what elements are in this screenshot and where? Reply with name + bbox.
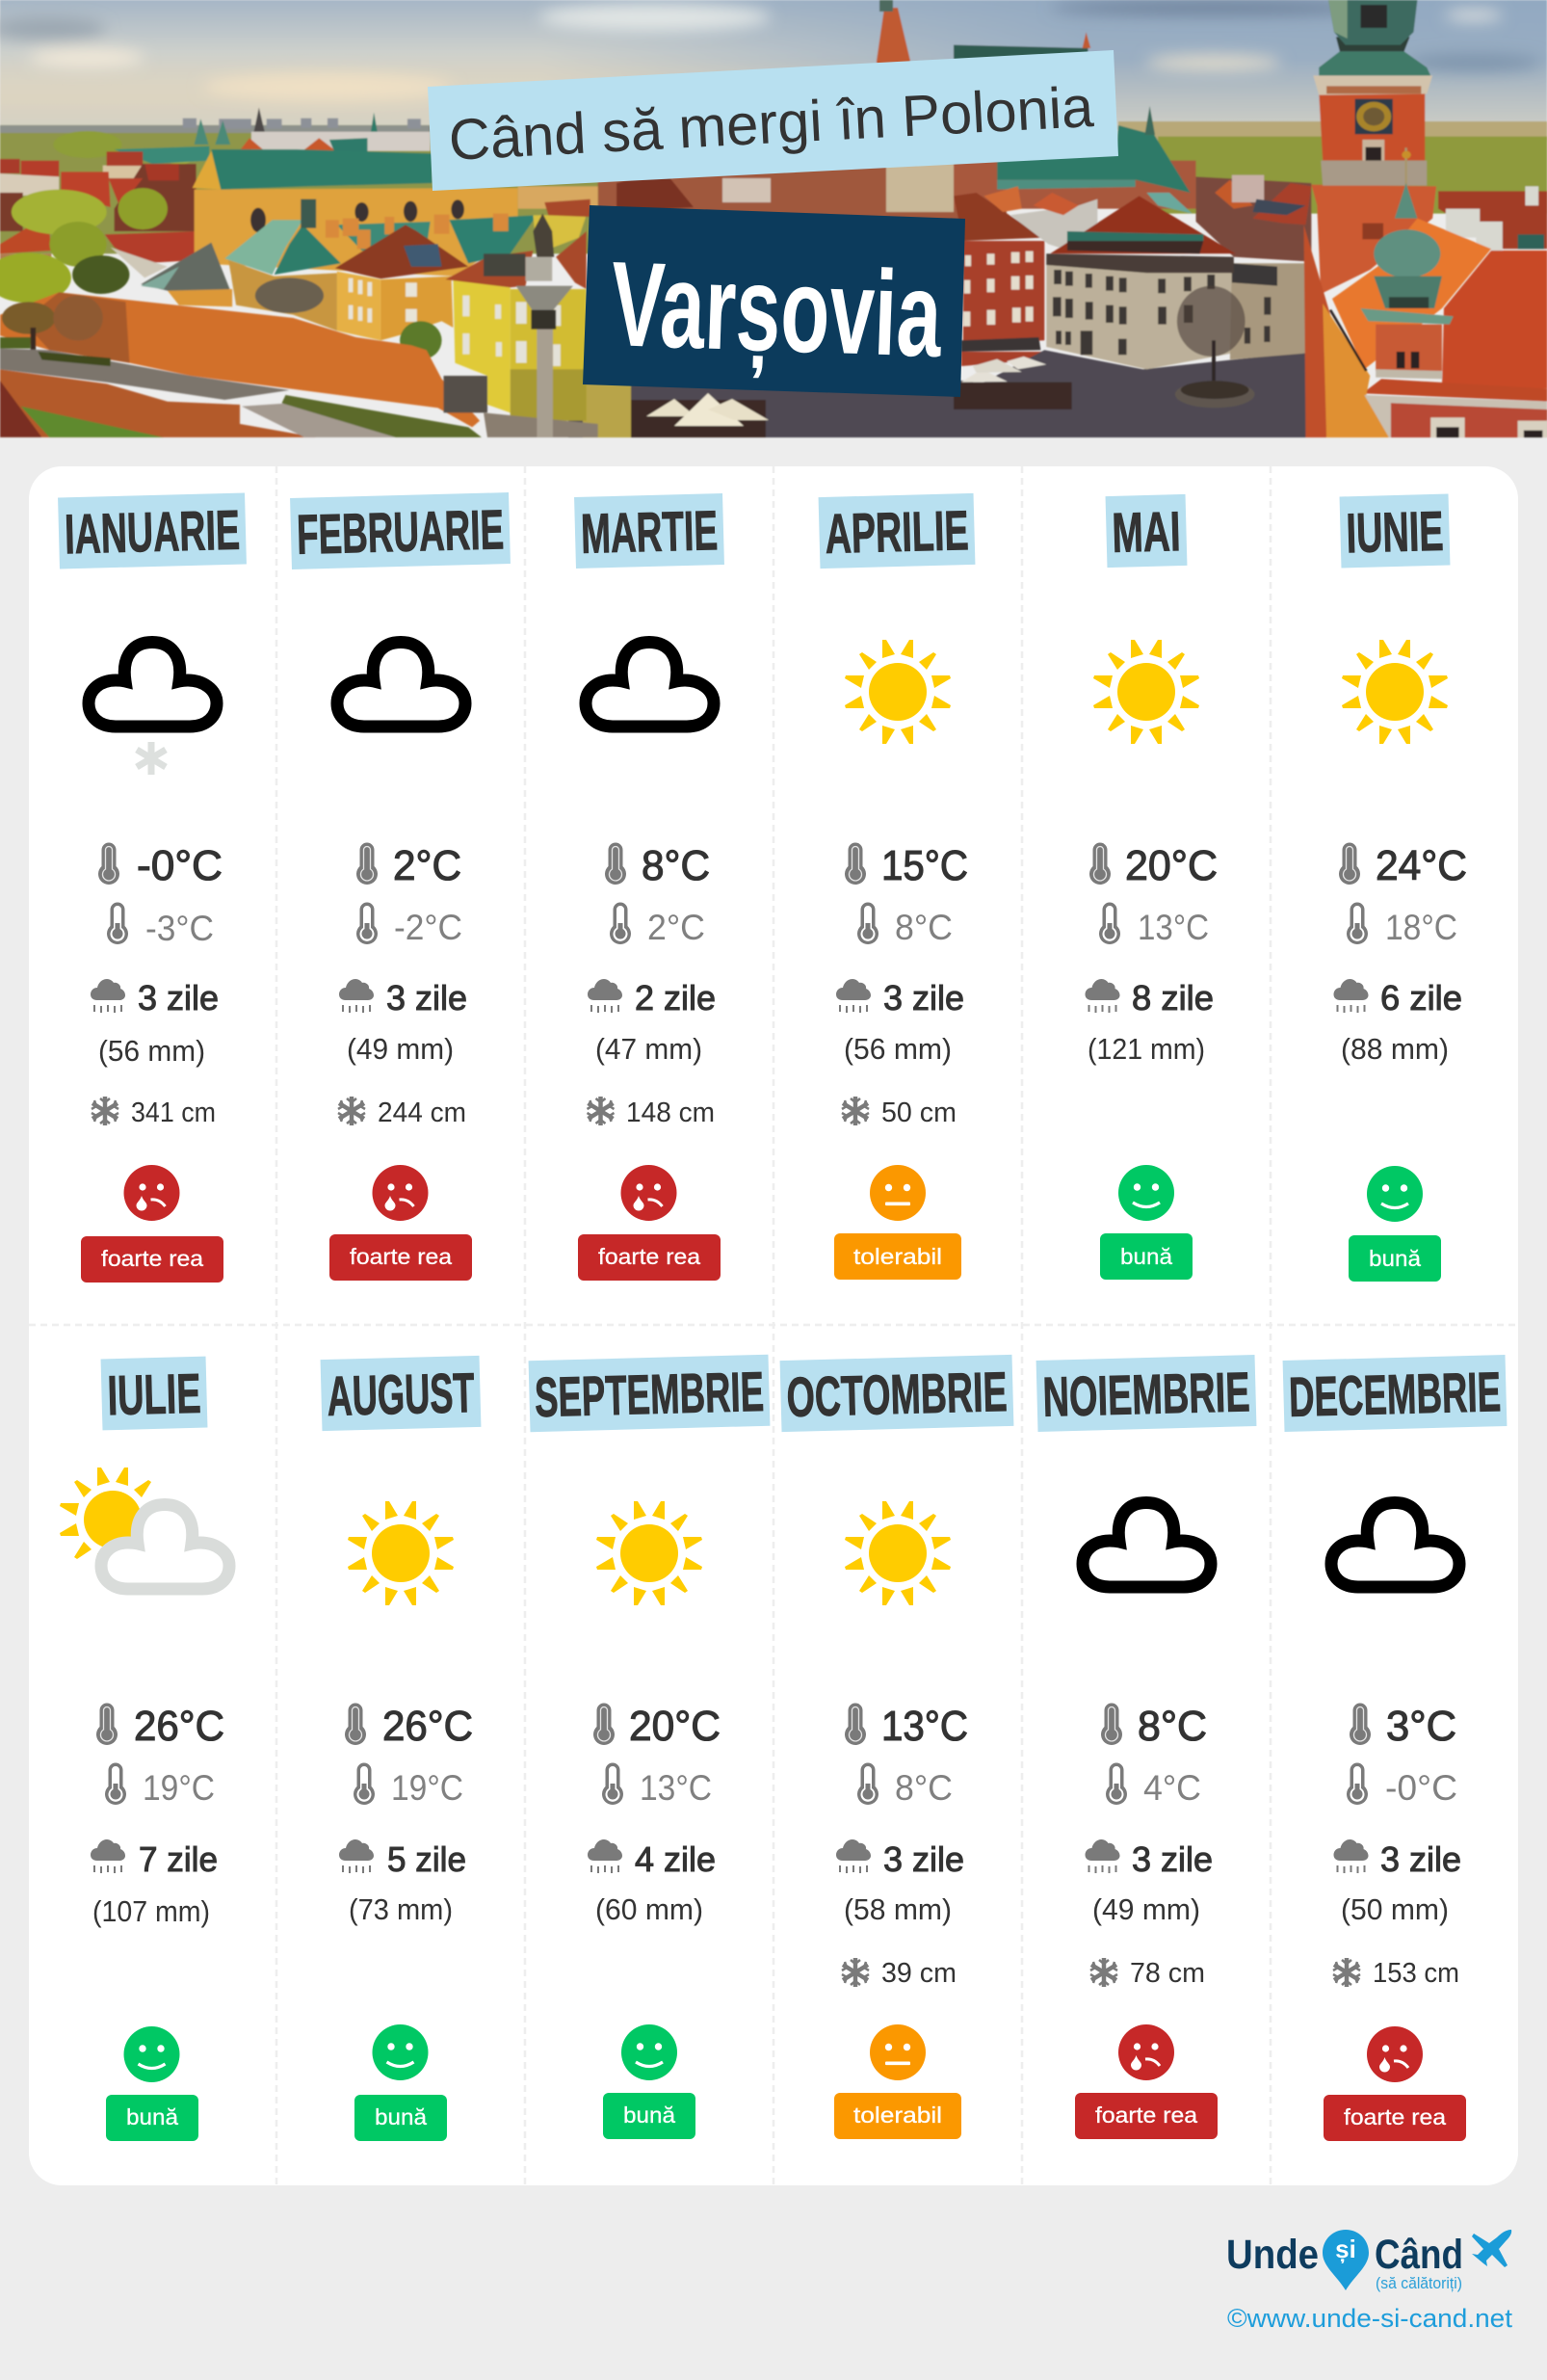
- temperatures: [605, 842, 710, 947]
- rain: [91, 1839, 218, 1928]
- rating: [834, 2024, 961, 2139]
- city name banner: [583, 205, 965, 397]
- rain: (49 mm): [1092, 1892, 1200, 1926]
- panel: iulie: [60, 1357, 229, 2141]
- month label: [1106, 494, 1187, 568]
- month label: [574, 493, 724, 569]
- rating: [1324, 2026, 1466, 2141]
- month label: IULIE: [107, 1362, 201, 1427]
- panel: august: [321, 1356, 481, 2141]
- rating: [578, 1165, 721, 1281]
- rating: foarte rea: [1095, 2102, 1197, 2128]
- white calendar card: [29, 466, 1518, 2185]
- snow: 78 cm: [1130, 1958, 1205, 1989]
- month label: FEBRUARIE: [296, 498, 505, 567]
- rain: (88 mm): [1341, 1032, 1449, 1066]
- temperatures: [1101, 1703, 1207, 1808]
- month label: [1036, 1355, 1256, 1432]
- temperatures: 8°C: [1138, 1703, 1207, 1750]
- rating: bună: [1369, 1246, 1421, 1271]
- logo: Unde și Când: Unde: [1226, 2232, 1319, 2278]
- rain: [588, 978, 716, 1066]
- panel: mai: [1085, 494, 1218, 1280]
- rain: (49 mm): [347, 1032, 454, 1066]
- temperatures: -3°C: [145, 909, 214, 948]
- month label: [101, 1357, 207, 1430]
- rain: 5 zile: [387, 1839, 466, 1879]
- rating: tolerabil: [853, 1244, 942, 1269]
- rating: foarte rea: [101, 1246, 203, 1271]
- icon: cloud with snow: [89, 642, 217, 775]
- month label: [529, 1355, 770, 1432]
- temperatures: [96, 1703, 224, 1808]
- rating: [603, 2024, 695, 2139]
- right half of the photo: [954, 0, 1547, 437]
- temperatures: 8°C: [895, 1768, 953, 1808]
- rain: [1085, 978, 1214, 1066]
- temperatures: -0°C: [1385, 1768, 1457, 1808]
- temperatures: -2°C: [394, 908, 462, 947]
- month label: [819, 493, 975, 569]
- rating: [106, 2026, 198, 2141]
- temperatures: 4°C: [1143, 1768, 1201, 1808]
- snow: 341 cm: [131, 1097, 216, 1128]
- header photo: Warsaw old town: [0, 0, 1547, 437]
- rating: [834, 1165, 961, 1280]
- snow: [842, 1958, 957, 1989]
- icon: sun: [1342, 640, 1448, 744]
- temperatures: 24°C: [1376, 842, 1467, 889]
- temperatures: 20°C: [1125, 842, 1218, 889]
- title banner: [428, 50, 1118, 191]
- icon: sun behind cloud: [60, 1468, 229, 1589]
- icon: sun: [845, 640, 951, 744]
- rain: 3 zile: [138, 978, 219, 1018]
- rain: 8 zile: [1132, 978, 1214, 1018]
- rain: [588, 1839, 716, 1926]
- icon: cloud: [586, 642, 714, 727]
- temperatures: [345, 1703, 473, 1808]
- logo: Unde și Când: [1226, 2230, 1511, 2292]
- rain: 3 zile: [1380, 1839, 1461, 1879]
- snow: [842, 1097, 957, 1128]
- rating: [81, 1165, 223, 1283]
- month label: OCTOMBRIE: [786, 1361, 1008, 1429]
- snow: 153 cm: [1373, 1958, 1459, 1989]
- temperatures: 19°C: [391, 1768, 463, 1808]
- rain: 7 zile: [139, 1839, 218, 1879]
- snow: 50 cm: [881, 1097, 957, 1128]
- temperatures: 13°C: [881, 1703, 968, 1750]
- snow: [92, 1097, 216, 1128]
- temperatures: [356, 842, 462, 947]
- panel: decembrie: [1283, 1355, 1507, 2141]
- rain: (60 mm): [595, 1892, 703, 1926]
- month label: MAI: [1112, 500, 1181, 565]
- rating: foarte rea: [350, 1244, 452, 1269]
- month label: [1340, 494, 1450, 568]
- rating: foarte rea: [598, 1244, 700, 1269]
- copyright url: ©www.unde-si-cand.net: [1227, 2304, 1513, 2333]
- snow: [1090, 1958, 1205, 1989]
- temperatures: 26°C: [382, 1703, 473, 1750]
- title banner: Când să mergi în Polonia: [447, 74, 1095, 172]
- temperatures: 18°C: [1385, 908, 1457, 947]
- rain: 2 zile: [635, 978, 716, 1018]
- icon: cloud: [337, 642, 465, 727]
- rain: 6 zile: [1380, 978, 1462, 1018]
- icon: plane: [1472, 2230, 1511, 2267]
- temperatures: [1347, 1703, 1457, 1808]
- rain: (56 mm): [98, 1034, 205, 1068]
- temperatures: [845, 1703, 968, 1808]
- icon: cloud: [1331, 1503, 1459, 1587]
- panel: iunie: [1333, 494, 1467, 1282]
- snow: 148 cm: [626, 1097, 715, 1128]
- snow: [338, 1097, 466, 1128]
- temperatures: 15°C: [881, 842, 968, 889]
- rating: [1349, 1166, 1441, 1282]
- rating: tolerabil: [853, 2102, 942, 2128]
- temperatures: 2°C: [393, 842, 461, 889]
- icon: sun: [845, 1501, 951, 1605]
- panel: ianuarie: [58, 492, 247, 1283]
- temperatures: 3°C: [1386, 1703, 1456, 1750]
- rating: bună: [375, 2104, 427, 2129]
- temperatures: 19°C: [143, 1768, 215, 1808]
- rain: [836, 978, 964, 1066]
- rain: (121 mm): [1088, 1032, 1205, 1066]
- panel: octombrie: [780, 1355, 1013, 2139]
- rain: [1085, 1839, 1213, 1926]
- month label: [321, 1356, 481, 1431]
- distant centre: [578, 149, 1007, 226]
- temperatures: 2°C: [647, 908, 705, 947]
- month label: SEPTEMBRIE: [534, 1361, 765, 1429]
- rain: [91, 978, 219, 1068]
- month label: MARTIE: [580, 499, 719, 566]
- month label: IUNIE: [1346, 500, 1444, 565]
- snow: 39 cm: [881, 1958, 957, 1989]
- rating: [354, 2024, 447, 2141]
- panel: noiembrie: [1036, 1355, 1256, 2139]
- rating: [1100, 1165, 1193, 1280]
- rain: 3 zile: [883, 1839, 964, 1879]
- rain: 3 zile: [1132, 1839, 1213, 1879]
- logo: Unde și Când: Când: [1375, 2232, 1463, 2278]
- left half of the photo: [0, 108, 598, 437]
- snow: [588, 1097, 715, 1128]
- temperatures: [593, 1703, 721, 1808]
- icon: cloud: [1083, 1503, 1211, 1587]
- temperatures: 8°C: [895, 908, 953, 947]
- panel: aprilie: [819, 493, 975, 1280]
- month label: IANUARIE: [64, 499, 241, 566]
- snow: 244 cm: [378, 1097, 466, 1128]
- month label: [58, 492, 247, 569]
- rain: (47 mm): [595, 1032, 702, 1066]
- month label: APRILIE: [825, 499, 969, 566]
- panel: septembrie: [529, 1355, 770, 2139]
- rain: (56 mm): [844, 1032, 952, 1066]
- temperatures: [1339, 842, 1467, 947]
- panel: martie: [574, 493, 724, 1281]
- month label: AUGUST: [327, 1362, 475, 1428]
- temperatures: 20°C: [629, 1703, 721, 1750]
- rating: [1075, 2024, 1218, 2139]
- rain: (58 mm): [844, 1892, 952, 1926]
- rating: bună: [1120, 1244, 1172, 1269]
- snow: [1333, 1958, 1459, 1989]
- rain: (107 mm): [92, 1894, 210, 1928]
- temperatures: [845, 842, 968, 947]
- rain: (50 mm): [1341, 1892, 1449, 1926]
- rain: 3 zile: [386, 978, 467, 1018]
- rain: [1333, 1839, 1461, 1926]
- logo: Unde și Când: și: [1335, 2235, 1356, 2263]
- logo: Unde și Când: (să călătoriți): [1376, 2274, 1462, 2292]
- icon: sun: [348, 1501, 454, 1605]
- rain: 3 zile: [883, 978, 964, 1018]
- temperatures: -0°C: [137, 842, 223, 889]
- rain: [339, 978, 467, 1066]
- icon: sun: [596, 1501, 702, 1605]
- rating: foarte rea: [1344, 2104, 1446, 2129]
- panel: februarie: [290, 492, 511, 1281]
- temperatures: [1089, 842, 1218, 947]
- rating: [329, 1165, 472, 1281]
- month label: NOIEMBRIE: [1042, 1361, 1250, 1429]
- temperatures: 13°C: [640, 1768, 712, 1808]
- temperatures: 26°C: [134, 1703, 224, 1750]
- month label: [780, 1355, 1013, 1432]
- city name banner: Varșovia: [609, 237, 945, 384]
- rain: (73 mm): [349, 1892, 453, 1926]
- rain: [339, 1839, 466, 1926]
- rain: [836, 1839, 964, 1926]
- icon: map pin: [1323, 2230, 1369, 2290]
- icon: sun: [1093, 640, 1199, 744]
- rating: bună: [126, 2104, 178, 2129]
- month label: [290, 492, 511, 569]
- rain: 4 zile: [635, 1839, 716, 1879]
- temperatures: [98, 842, 223, 948]
- rain: [1333, 978, 1462, 1066]
- temperatures: 8°C: [642, 842, 710, 889]
- temperatures: 13°C: [1138, 908, 1209, 947]
- rating: bună: [623, 2102, 675, 2128]
